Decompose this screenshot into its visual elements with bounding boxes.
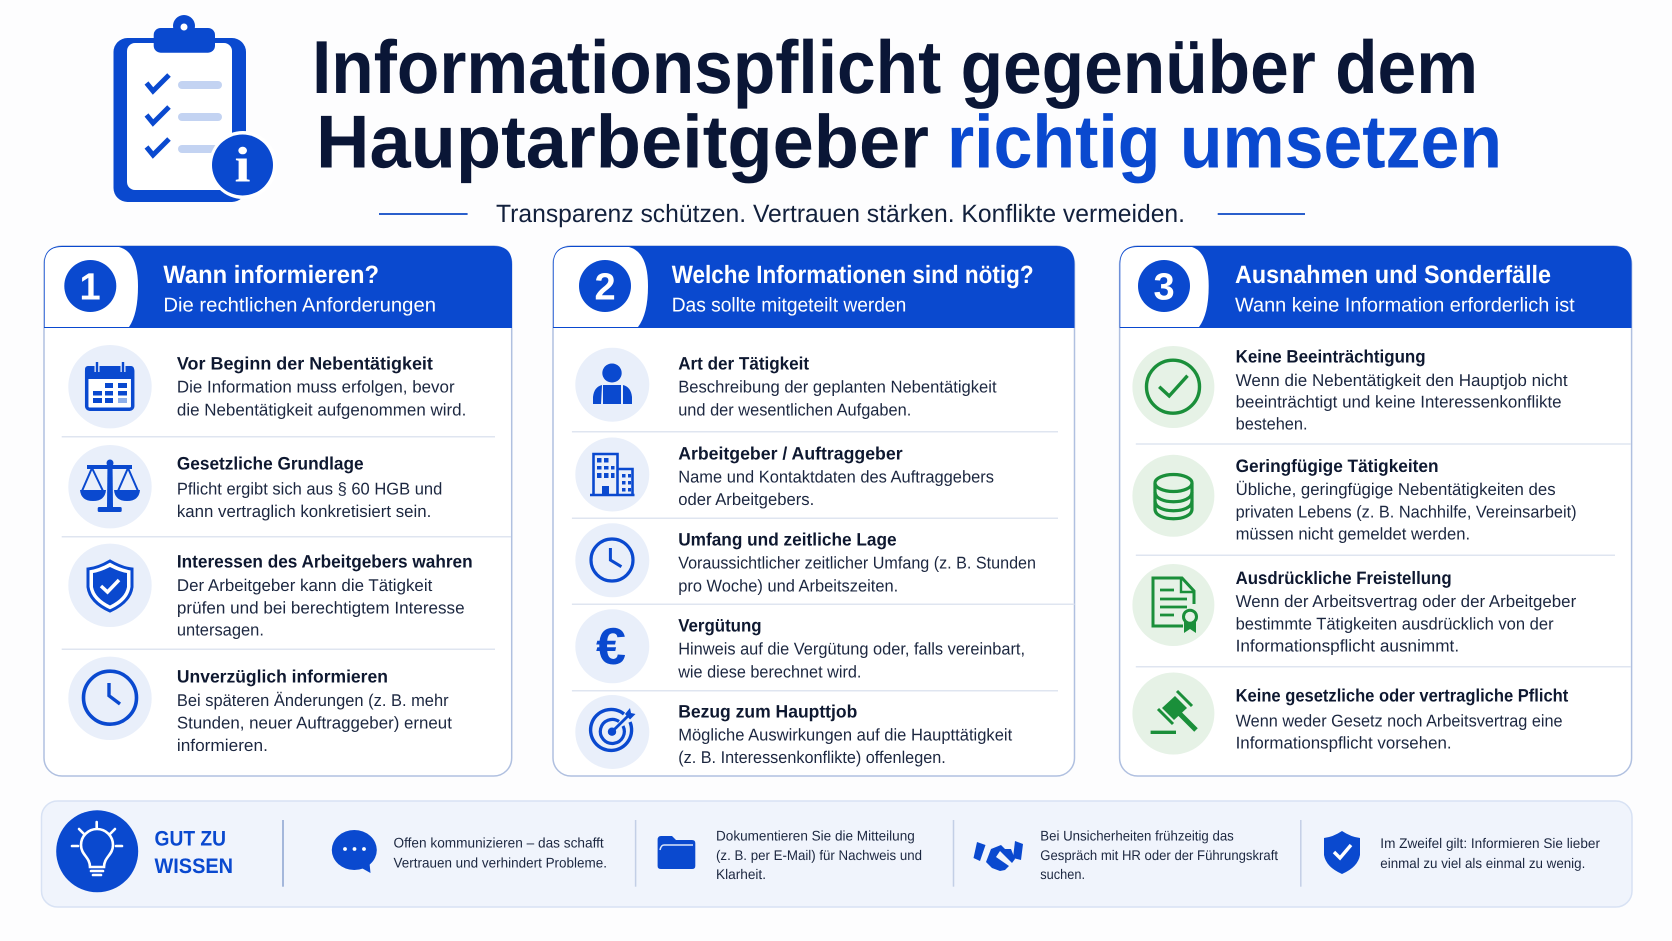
text: Art der Tätigkeit: und der wesentlichen Aufgaben. [678,400,911,419]
title: richtig umsetzen [947,100,1502,184]
text: Gesetzliche Grundlage: Pflicht ergibt sich aus § 60 HGB und [177,479,442,498]
icon: gavel [1132,672,1214,754]
panel header 3: Ausnahmen und Sonderfälle [1235,261,1551,289]
icon: building [575,438,649,512]
icon: chat bubble [332,830,377,873]
text: Geringfügige: privaten Lebens (z. B. Nachhilfe, Vereinsarbeit) [1236,502,1577,521]
panel header 3: Wann keine Information erforderlich ist [1235,295,1575,317]
panel header 1: Die rechtlichen Anforderungen [163,295,436,317]
text: tip 1 [394,834,607,870]
icon: check circle [1132,346,1214,428]
text: Keine Beeinträchtigung: bestehen. [1236,415,1308,434]
icon: handshake [974,841,1023,871]
text: Vergütung: Hinweis auf die Vergütung oder, falls vereinbart, [678,640,1025,659]
icon: folder [658,836,695,869]
heading: Gut zu wissen [154,828,233,878]
row: Keine gesetzliche oder vertragliche Pflicht [1132,672,1568,754]
text: Gesetzliche Grundlage [177,453,442,521]
icon: shield [68,544,152,627]
tip: dokumentieren [658,828,922,882]
title: Hauptarbeitgeber [316,100,929,184]
text: Bezug: Bezug zum Haupttjob [678,701,857,721]
icon: clipboard with info badge [114,15,277,202]
text: Keine gesetzliche: Wenn weder Gesetz noch Arbeitsvertrag eine [1236,711,1563,730]
text: Interessen: untersagen. [177,620,264,639]
panel: Gut zu wissen [42,801,1632,907]
row: Art der Tätigkeit [575,348,997,422]
text: Bezug: (z. B. Interessenkonflikte) offenlegen. [678,748,946,767]
text: Keine Beeinträchtigung: beeinträchtigt und keine Interessenkonflikte [1236,393,1562,412]
text: Interessen: prüfen und bei berechtigtem Interesse [177,598,465,617]
icon: light bulb [56,810,138,892]
text: Interessen: Interessen des Arbeitgebers wahren [177,552,473,572]
text: Bezug: Mögliche Auswirkungen auf die Haupttätigkeit [678,726,1012,745]
text: Arbeitgeber: Arbeitgeber / Auftraggeber [678,443,903,463]
icon: person [575,348,649,422]
text: Vergütung [677,615,1025,681]
row: Arbeitgeber / Auftraggeber [575,438,994,512]
text: tip 2: Dokumentieren Sie die Mitteilung [716,828,915,844]
icon: clock [575,523,649,597]
text: Vor Beginn: Die Information muss erfolgen, bevor [177,378,455,397]
panel header 1 [44,246,512,328]
text: Keine gesetzliche: Informationspflicht vorsehen. [1236,734,1452,753]
tip: im zweifel [1324,831,1600,874]
row: Geringfügige Tätigkeiten [1132,455,1577,543]
row: Bezug zum Haupttjob [575,695,1012,769]
heading: Gut zu wissen: GUT ZU [154,828,226,850]
text: tip 3 [1040,828,1278,882]
text: Ausdrückliche: Ausdrückliche Freistellung [1236,568,1452,588]
text: tip 4: einmal zu viel als einmal zu wenig. [1380,855,1585,871]
text: Art der Tätigkeit: Beschreibung der geplanten Nebentätigkeit [678,378,997,397]
text: tip 2: (z. B. per E-Mail) für Nachweis und [716,847,922,863]
text: Unverzüglich: Bei späteren Änderungen (z. B. mehr [177,691,449,710]
text: Geringfügige: Übliche, geringfügige Nebentätigkeiten des [1236,480,1556,499]
tip: unsicherheiten [974,828,1278,882]
text: Keine Beeinträchtigung: Keine Beeinträchtigung [1236,347,1426,367]
panel: Ausnahmen und Sonderfälle [1120,246,1632,776]
text: Interessen: Der Arbeitgeber kann die Tätigkeit [177,576,433,595]
text: tip 4: Im Zweifel gilt: Informieren Sie lieber [1380,835,1600,851]
title: Informationspflicht gegenüber dem [312,25,1478,109]
title [312,25,1502,184]
text: Unverzüglich [177,667,452,755]
heading: Gut zu wissen: WISSEN [154,855,233,878]
row: Interessen des Arbeitgebers wahren [68,544,473,639]
text: Ausdrückliche: Informationspflicht ausnimmt. [1236,636,1459,655]
icon: calendar [68,345,152,428]
text: tip 1: Vertrauen und verhindert Probleme. [394,854,607,870]
row: Umfang und zeitliche Lage [575,523,1036,597]
icon: shield check [1324,831,1360,874]
panel header 3: 3 [1154,266,1175,308]
text: Interessen [177,552,473,639]
text: tip 3: Gespräch mit HR oder der Führungskraft [1040,847,1278,863]
text: Geringfügige: Geringfügige Tätigkeiten [1236,456,1439,476]
panel header 2: 2 [594,266,616,308]
panel: Welche Informationen [553,246,1074,776]
text: Geringfügige: müssen nicht gemeldet werden. [1236,524,1470,543]
text: Gesetzliche Grundlage: kann vertraglich konkretisiert sein. [177,502,431,521]
text: Bezug [678,701,1012,767]
icon: scales [68,445,152,528]
panel header 1: Wann informieren? [163,261,379,289]
text: Gesetzliche Grundlage: Gesetzliche Grundlage [177,453,364,473]
text: tip 2 [716,828,922,882]
text: tip 3: suchen. [1040,866,1085,882]
text: Ausdrückliche: Wenn der Arbeitsvertrag oder der Arbeitgeber [1236,592,1577,611]
row: Ausdrückliche Freistellung [1132,564,1577,655]
icon: euro [575,609,649,683]
panel: Wann informieren [44,246,512,776]
text: Keine Beeinträchtigung: Wenn die Nebentätigkeit den Hauptjob nicht [1236,371,1568,390]
text: Unverzüglich: informieren. [177,736,268,755]
text: Unverzüglich: Unverzüglich informieren [177,667,388,687]
text: Vergütung: Vergütung [678,615,762,635]
icon: target [575,695,649,769]
row: Vor Beginn der Nebentätigkeit [68,345,466,428]
icon: clock [68,657,152,740]
text: Keine Beeinträchtigung [1236,347,1568,434]
text: Keine gesetzliche: Keine gesetzliche oder vertragliche Pflicht [1236,686,1568,706]
text: Umfang: Umfang und zeitliche Lage [678,529,897,549]
text: Umfang: Voraussichtlicher zeitlicher Umfang (z. B. Stunden [678,554,1036,573]
tip: offen kommunizieren [332,830,607,873]
text: Vergütung: wie diese berechnet wird. [677,662,861,681]
panel header 1: 1 [80,266,101,308]
text: tip 2: Klarheit. [716,866,766,882]
panel header 2: Das sollte mitgeteilt werden [672,295,906,317]
row: Keine Beeinträchtigung [1132,346,1568,434]
text: Arbeitgeber: Name und Kontaktdaten des Auftraggebers [678,468,994,487]
text: Umfang [678,529,1036,595]
row: Gesetzliche Grundlage [68,445,442,528]
text: Ausdrückliche [1236,568,1577,655]
panel header 2: Welche Informationen sind nötig? [672,261,1034,289]
text: Unverzüglich: Stunden, neuer Auftraggeber) erneut [177,713,452,732]
text: Geringfügige [1236,456,1577,543]
text: tip 3: Bei Unsicherheiten frühzeitig das [1040,828,1234,844]
icon: euro: € [596,618,626,676]
icon: coins [1132,455,1214,537]
subtitle: Transparenz schützen. Vertrauen stärken. Konflikte vermeiden. [496,200,1185,228]
text: Art der Tätigkeit [678,353,997,419]
panel header 3 [1120,246,1632,328]
row: Vergütung [575,609,1025,683]
text: Art der Tätigkeit: Art der Tätigkeit [678,353,809,373]
text: Vor Beginn [177,353,466,419]
icon: clipboard with info badge: i [234,137,251,193]
text: Vor Beginn: die Nebentätigkeit aufgenommen wird. [177,400,466,419]
icon: document with seal [1132,564,1214,646]
row: Unverzüglich informieren [68,657,452,755]
text: Ausdrückliche: bestimmte Tätigkeiten ausdrücklich von der [1236,614,1554,633]
text: tip 1: Offen kommunizieren – das schafft [394,834,604,850]
text: tip 4 [1380,835,1600,871]
text: Arbeitgeber [678,443,994,509]
text: Arbeitgeber: oder Arbeitgebers. [678,490,814,509]
text: Keine gesetzliche [1236,686,1568,753]
text: Vor Beginn: Vor Beginn der Nebentätigkeit [177,353,433,373]
panel header 2 [553,246,1074,328]
text: Umfang: pro Woche) und Arbeitszeiten. [678,576,898,595]
